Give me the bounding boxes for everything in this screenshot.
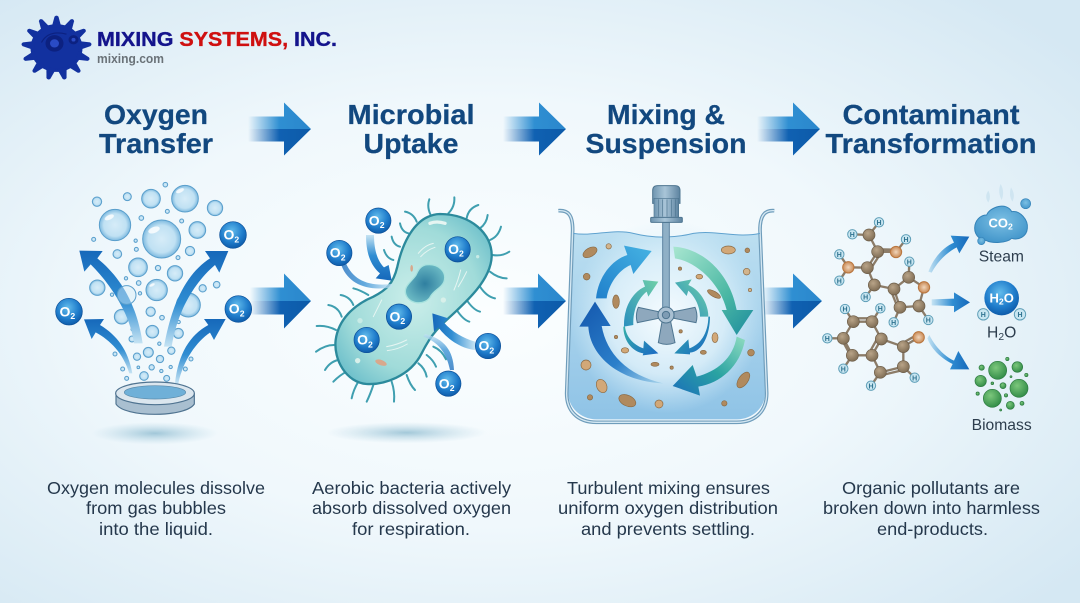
heading: Mixing & Suspension: Suspension (586, 128, 746, 159)
water surface line (573, 232, 760, 237)
O2 badge inside centre: O (389, 308, 400, 324)
cell body (335, 214, 492, 384)
panel: microbial uptake illustration (316, 197, 509, 443)
description: oxygen transfer: into the liquid. (99, 519, 213, 539)
arrow: lower right (175, 319, 226, 383)
translucent bubble over arrow (117, 286, 136, 304)
hydrogen atoms: H (825, 336, 830, 343)
inner flow arrow: lower left (623, 327, 658, 355)
O2 badge inside lower (354, 327, 379, 353)
inner flow arrow: upper left (624, 280, 658, 327)
hydrogen atoms: H (868, 383, 874, 390)
product: H2O molecule (978, 281, 1026, 320)
heading: Mixing & Suspension (586, 99, 746, 159)
hydrogen atoms: H (878, 306, 883, 313)
water glow (570, 220, 763, 413)
O2 badge inside upper (445, 237, 470, 262)
tank wall (558, 211, 774, 422)
O2 badge upper right (220, 222, 246, 248)
O2 badge inside upper: O (448, 241, 459, 257)
label: Biomass: Biomass (972, 417, 1032, 434)
description: microbial uptake: for respiration. (352, 519, 470, 539)
product: H2O molecule: H (981, 312, 986, 319)
arrow: header 2 (503, 102, 566, 156)
O2 badge inside centre (386, 304, 412, 329)
O2 badge lower right: 2 (240, 308, 245, 318)
product: H2O molecule: 2 (999, 297, 1004, 307)
description: contaminant transformation (823, 478, 1040, 539)
diffuser disk (116, 382, 194, 414)
arrow: header 1 (248, 102, 311, 156)
O2 badge bottom: 2 (450, 383, 455, 393)
hydrogen atoms: H (891, 320, 896, 327)
product: H2O molecule: O (1004, 291, 1014, 306)
O2 badge left: 2 (70, 311, 75, 321)
description: contaminant transformation: broken down into harmless (823, 498, 1040, 518)
hydrogen atoms (823, 218, 933, 390)
hydrogen atoms: H (926, 318, 931, 325)
O2 badge upper right: 2 (234, 234, 239, 244)
arrow: middle 1 (250, 274, 311, 328)
description: oxygen transfer: from gas bubbles (86, 498, 226, 518)
O2 badge lower right: O (229, 301, 240, 317)
O2 badge left (56, 298, 82, 325)
icon: blue gear (21, 16, 92, 81)
tank wall highlight (558, 211, 774, 422)
carbon atoms (837, 229, 925, 378)
heading: Oxygen Transfer (99, 99, 213, 159)
heading: Contaminant Transformation: Transformation (826, 128, 1036, 159)
O2 badge top: O (369, 212, 380, 228)
arrow: middle 2 (503, 274, 566, 328)
O2 badge left (327, 240, 352, 266)
arrow: header 3 (757, 102, 820, 156)
O2 badge inside centre: 2 (400, 316, 405, 326)
O2 badge bottom: O (439, 375, 450, 391)
nucleus (405, 265, 445, 303)
cilia (316, 197, 509, 402)
description: oxygen transfer (47, 478, 265, 539)
arrow: to water (932, 292, 970, 312)
oxygen atoms (843, 246, 930, 343)
hydrogen atoms: H (903, 237, 909, 244)
O2 badge left: 2 (341, 252, 346, 262)
description: microbial uptake: absorb dissolved oxygen (312, 498, 511, 518)
molecule (823, 218, 933, 390)
description: microbial uptake: Aerobic bacteria actively (312, 478, 511, 498)
particles (581, 244, 754, 409)
product: biomass cells (975, 357, 1028, 411)
flow arrow: lower left (579, 302, 663, 383)
product: H2O molecule: H (1017, 312, 1023, 319)
panel: contaminant transformation illustration (823, 184, 1032, 434)
hydrogen atoms: H (842, 307, 848, 314)
hydrogen atoms: H (907, 259, 912, 266)
inner flow arrow: upper right (675, 279, 708, 317)
O2 badge left: O (330, 245, 341, 261)
website: mixing.com (97, 51, 164, 66)
bubbles (90, 182, 223, 381)
logo (21, 16, 337, 81)
panel: oxygen transfer illustration (56, 182, 252, 445)
O2 badge left: O (59, 303, 70, 319)
label: H2O: H (987, 324, 998, 341)
O2 badge inside upper: 2 (459, 249, 464, 259)
heading: Contaminant Transformation: Contaminant (842, 99, 1020, 130)
O2 badge bottom (436, 371, 461, 396)
heading: Microbial Uptake: Uptake (364, 128, 458, 159)
arrow: lower left (84, 319, 132, 373)
label: H2O: 2 (998, 332, 1004, 343)
label: H2O: O (1004, 324, 1016, 341)
arrow: to steam (928, 236, 969, 273)
bacterium shadow (327, 422, 487, 443)
product: CO2 cloud with steam (975, 184, 1031, 245)
hydrogen atoms: H (863, 295, 868, 302)
hydrogen atoms: H (837, 252, 842, 259)
motor (651, 186, 682, 222)
flow arrow: lower right (673, 337, 745, 396)
arrow: to biomass (927, 335, 969, 369)
company name: MIXING SYSTEMS, INC. (97, 29, 337, 51)
O2 badge right: 2 (489, 345, 494, 355)
heading: Oxygen Transfer: Oxygen (104, 99, 208, 130)
panel: mixing tank illustration (558, 186, 774, 422)
description: mixing and suspension (558, 478, 778, 539)
arrow: top into cell (366, 235, 392, 281)
product: CO2 cloud with steam: 2 (1008, 221, 1013, 231)
inner flow arrow: lower right (674, 317, 710, 354)
diffuser shadow (92, 422, 218, 445)
description: mixing and suspension: Turbulent mixing ensures (567, 478, 770, 498)
flow arrow: right (673, 247, 753, 335)
shaft (663, 222, 669, 316)
arrow: middle 3 (762, 274, 822, 328)
O2 badge inside lower: O (357, 332, 368, 348)
hydrogen atoms: H (837, 278, 842, 285)
label: Steam: Steam (979, 249, 1024, 266)
O2 badge right (475, 333, 501, 359)
heading: Microbial Uptake (348, 99, 474, 159)
hydrogen atoms: H (841, 366, 846, 373)
heading: Mixing & Suspension: Mixing & (607, 99, 725, 130)
hydrogen atoms: H (850, 232, 855, 239)
O2 badge lower right (225, 296, 252, 322)
uptake stream left (342, 263, 392, 288)
bubble highlights (104, 187, 188, 301)
description: contaminant transformation: end-products. (877, 519, 988, 539)
heading: Contaminant Transformation (826, 99, 1036, 159)
product: H2O molecule: H (990, 291, 999, 306)
description: mixing and suspension: uniform oxygen distribution (558, 498, 778, 518)
arrow: right into cell (432, 313, 475, 350)
organelles (373, 222, 467, 351)
O2 badge upper right: O (223, 227, 234, 243)
uptake stream lower (423, 334, 454, 370)
description: microbial uptake (312, 478, 511, 539)
hydrogen atoms: H (876, 220, 882, 227)
arrow: upper left (79, 251, 143, 343)
O2 badge right: O (478, 338, 489, 354)
heading: Microbial Uptake: Microbial (348, 99, 474, 130)
O2 badge inside lower: 2 (368, 339, 373, 349)
cell detail spots (355, 255, 479, 367)
product: CO2 cloud with steam: CO (989, 215, 1008, 230)
heading: Oxygen Transfer: Transfer (99, 128, 213, 159)
flow arrow: upper left (596, 246, 652, 298)
description: mixing and suspension: and prevents settling. (581, 519, 755, 539)
impeller (636, 307, 697, 344)
O2 badge top (366, 208, 391, 233)
hydrogen atoms: H (912, 375, 917, 382)
description: oxygen transfer: Oxygen molecules dissolve (47, 478, 265, 498)
O2 badge top: 2 (380, 220, 385, 230)
bonds (827, 222, 928, 386)
arrow: upper right (164, 251, 228, 347)
water (568, 232, 765, 419)
description: contaminant transformation: Organic pollutants are (842, 478, 1020, 498)
